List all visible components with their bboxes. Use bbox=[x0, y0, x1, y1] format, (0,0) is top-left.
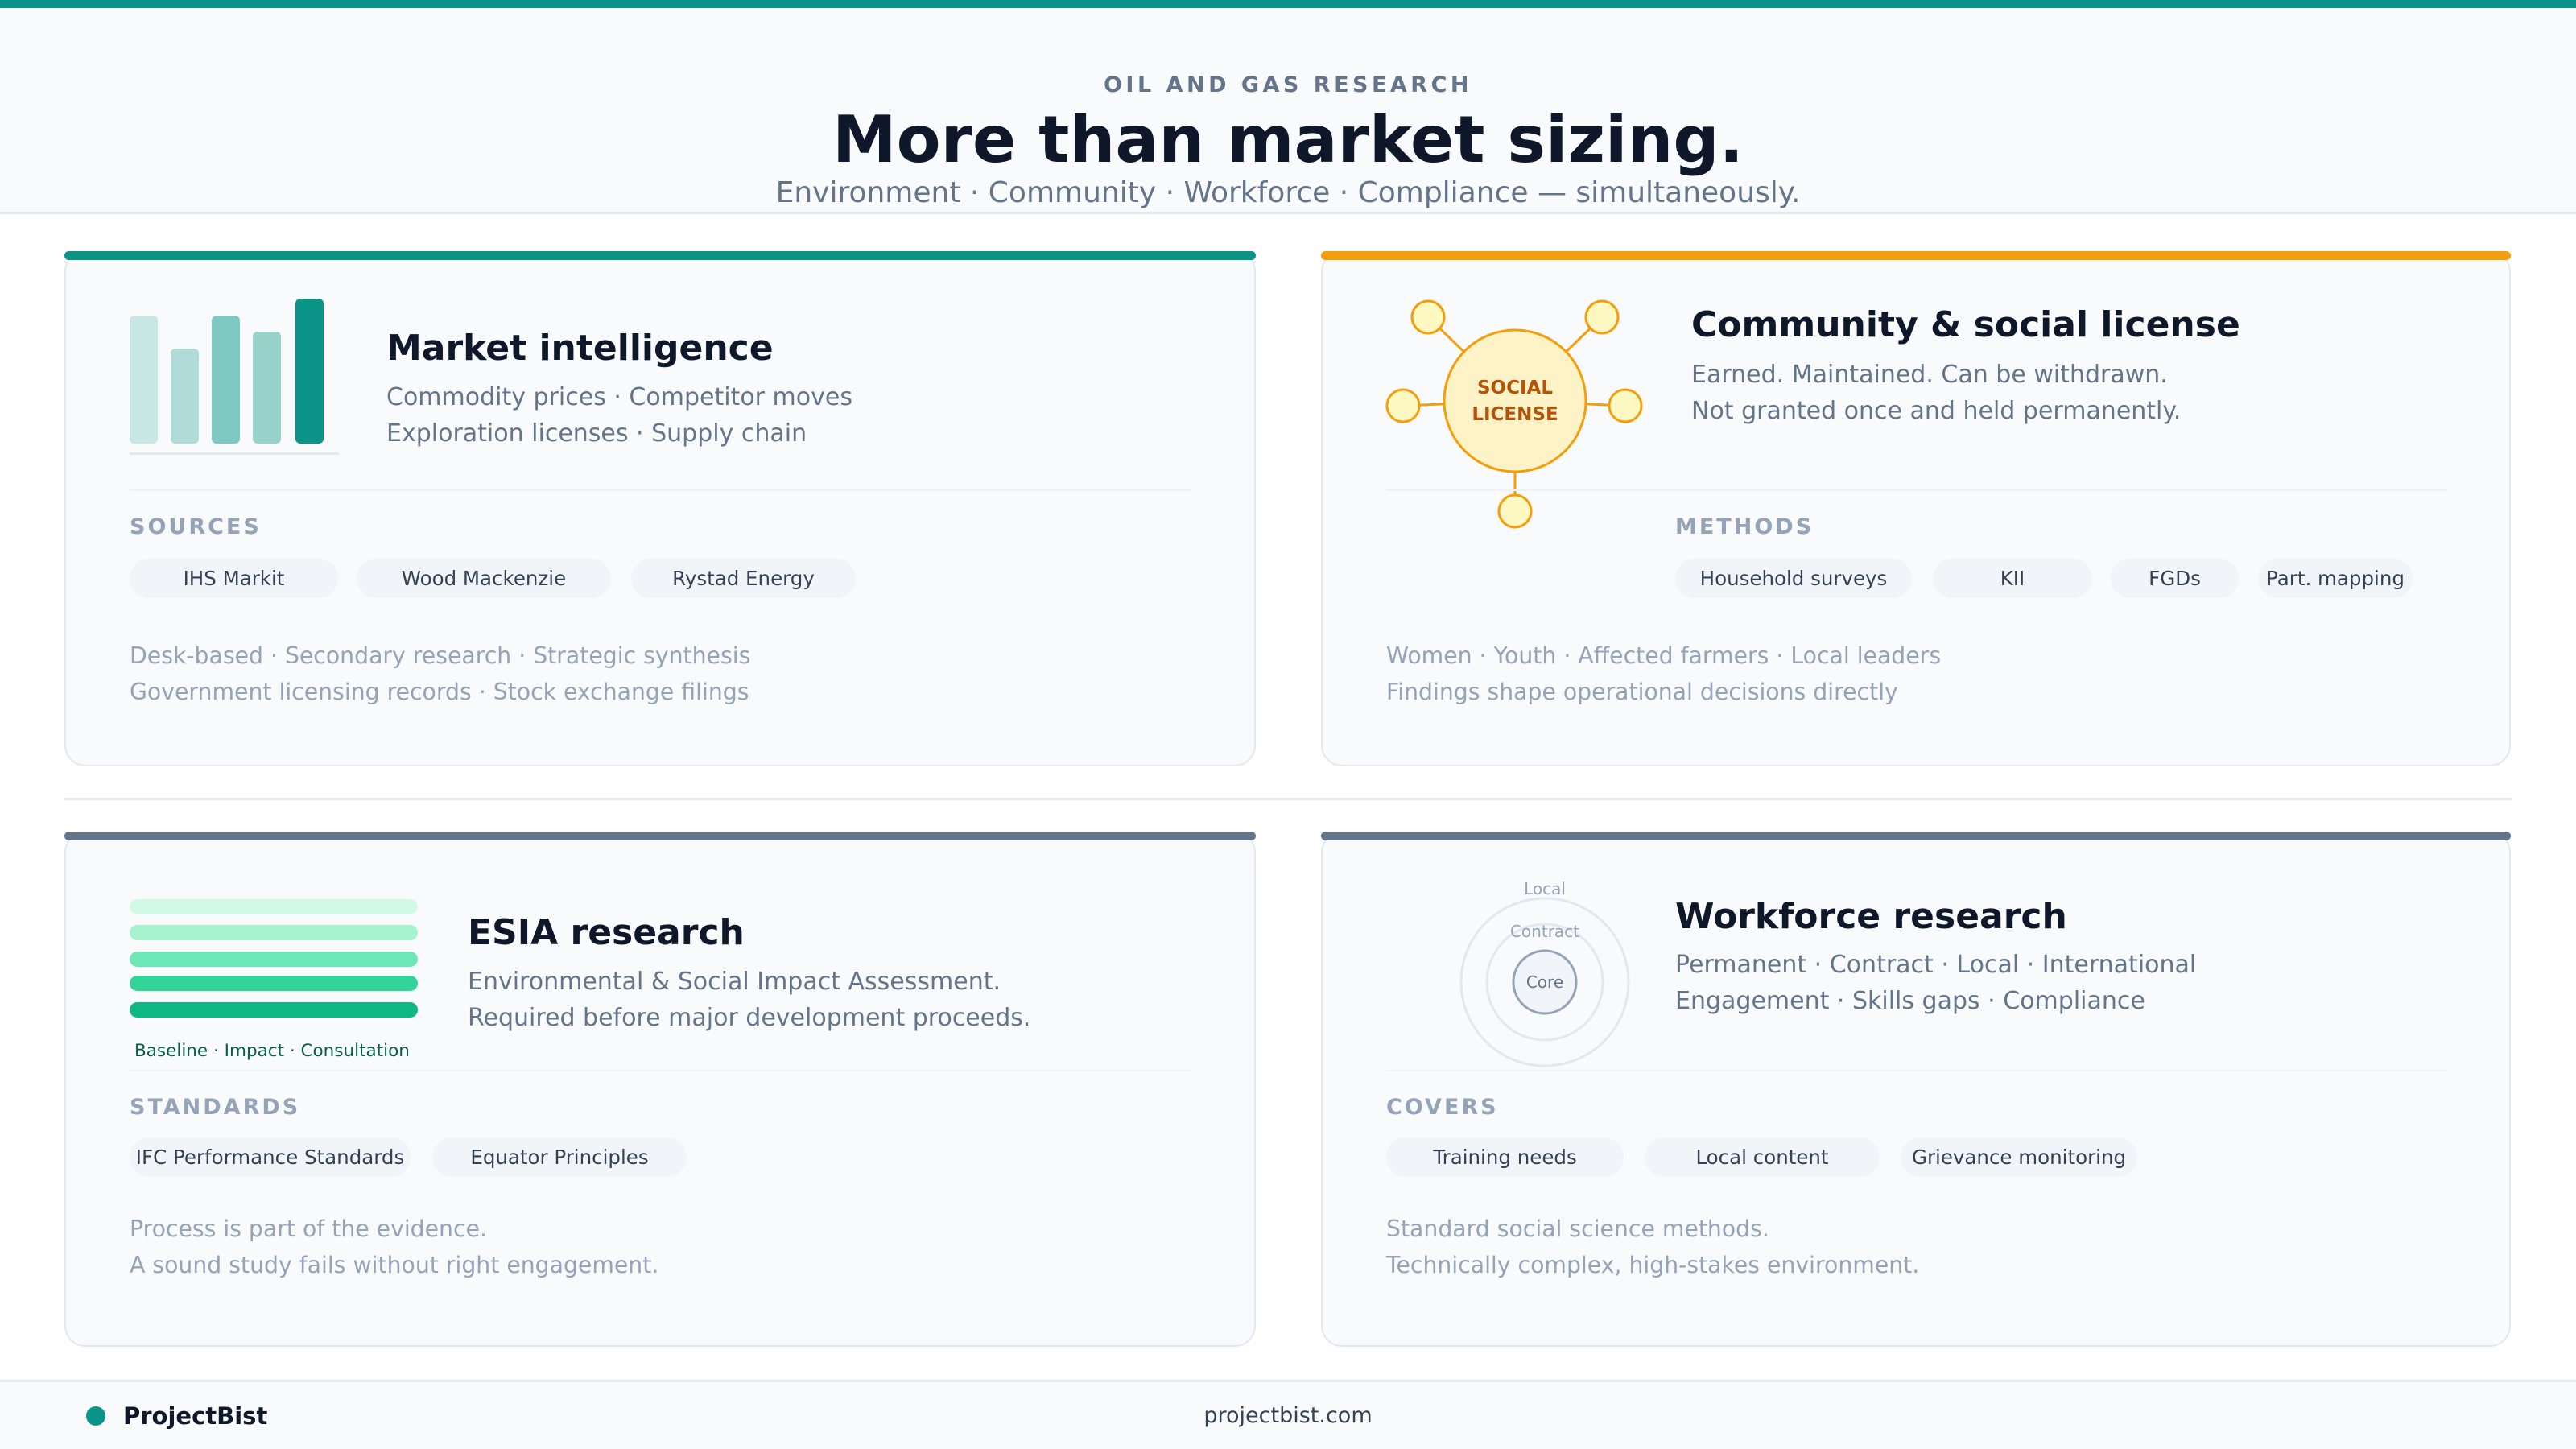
title: More than market sizing. bbox=[832, 102, 1744, 177]
panel: workforce bbox=[1321, 832, 2511, 1347]
pills: standards: Equator Principles bbox=[470, 1146, 649, 1169]
pills: methods: Part. mapping bbox=[2266, 567, 2405, 590]
notes bbox=[130, 1216, 658, 1278]
label: methods: METHODS bbox=[1675, 514, 1814, 539]
description bbox=[1675, 951, 2196, 1015]
notes: Government licensing records · Stock exchange filings bbox=[130, 679, 749, 705]
pills: covers bbox=[1433, 1146, 2126, 1169]
pills: covers: Local content bbox=[1695, 1146, 1829, 1169]
icon: concentric circles: Local bbox=[1524, 879, 1566, 898]
pills: methods bbox=[1700, 567, 2405, 590]
icon: social license hub bbox=[1386, 299, 1642, 528]
icon: concentric circles: Contract bbox=[1510, 922, 1579, 941]
heading: Workforce research bbox=[1675, 896, 2067, 937]
panel: ESIA bbox=[64, 832, 1256, 1347]
pills: methods: KII bbox=[2000, 567, 2025, 590]
footer url: projectbist.com bbox=[1203, 1403, 1373, 1428]
description: Commodity prices · Competitor moves bbox=[386, 383, 852, 411]
notes bbox=[1386, 642, 1941, 705]
notes bbox=[1386, 1216, 1919, 1278]
pills: standards: IFC Performance Standards bbox=[136, 1146, 404, 1169]
icon: concentric circles: Core bbox=[1526, 972, 1563, 992]
notes: Process is part of the evidence. bbox=[130, 1216, 487, 1242]
icon: layered bars bbox=[130, 899, 418, 1061]
pills: methods: Household surveys bbox=[1700, 567, 1887, 590]
pills: sources bbox=[184, 567, 815, 590]
description: Earned. Maintained. Can be withdrawn. bbox=[1691, 361, 2168, 389]
notes: Standard social science methods. bbox=[1386, 1216, 1769, 1242]
label: standards: STANDARDS bbox=[130, 1095, 300, 1120]
description: Exploration licenses · Supply chain bbox=[386, 419, 807, 448]
header bbox=[0, 8, 2576, 214]
notes: Desk-based · Secondary research · Strategic synthesis bbox=[130, 642, 750, 669]
top accent bar bbox=[0, 0, 2576, 8]
pills: methods: FGDs bbox=[2149, 567, 2201, 590]
description: Environmental & Social Impact Assessment. bbox=[468, 968, 1001, 996]
pills: sources: Wood Mackenzie bbox=[402, 567, 566, 590]
eyebrow: OIL AND GAS RESEARCH bbox=[1104, 72, 1472, 97]
brand: ProjectBist bbox=[123, 1402, 267, 1430]
notes: Technically complex, high-stakes environment. bbox=[1386, 1252, 1919, 1278]
pills: standards bbox=[136, 1146, 649, 1169]
icon: concentric circles bbox=[1460, 879, 1629, 1067]
label: sources: SOURCES bbox=[130, 514, 262, 539]
description: Permanent · Contract · Local · International bbox=[1675, 951, 2196, 979]
notes: A sound study fails without right engagement. bbox=[130, 1252, 658, 1278]
icon: social license hub: LICENSE bbox=[1472, 404, 1558, 425]
pills: sources: Rystad Energy bbox=[672, 567, 815, 590]
section divider bbox=[64, 798, 2512, 800]
description: Engagement · Skills gaps · Compliance bbox=[1675, 987, 2145, 1015]
pills: sources: IHS Markit bbox=[184, 567, 284, 590]
icon: social license hub: SOCIAL bbox=[1477, 378, 1553, 398]
icon: bar chart bbox=[130, 299, 339, 455]
description: Required before major development proceeds. bbox=[468, 1004, 1030, 1032]
footer bbox=[0, 1380, 2576, 1449]
icon: layered bars: Baseline · Impact · Consultation bbox=[134, 1041, 410, 1061]
notes bbox=[130, 642, 750, 705]
label: covers: COVERS bbox=[1386, 1095, 1499, 1120]
panel: community bbox=[1321, 251, 2511, 766]
notes: Findings shape operational decisions directly bbox=[1386, 679, 1898, 705]
description bbox=[1691, 361, 2181, 425]
subtitle: Environment · Community · Workforce · Compliance — simultaneously. bbox=[776, 176, 1800, 209]
heading: ESIA research bbox=[468, 912, 745, 953]
pills: covers: Training needs bbox=[1433, 1146, 1577, 1169]
panel: market intelligence bbox=[64, 251, 1256, 766]
description bbox=[386, 383, 852, 448]
description: Not granted once and held permanently. bbox=[1691, 397, 2181, 425]
heading: Market intelligence bbox=[386, 328, 774, 369]
notes: Women · Youth · Affected farmers · Local leaders bbox=[1386, 642, 1941, 669]
description bbox=[468, 968, 1030, 1032]
pills: covers: Grievance monitoring bbox=[1912, 1146, 2126, 1169]
heading: Community & social license bbox=[1691, 304, 2240, 345]
